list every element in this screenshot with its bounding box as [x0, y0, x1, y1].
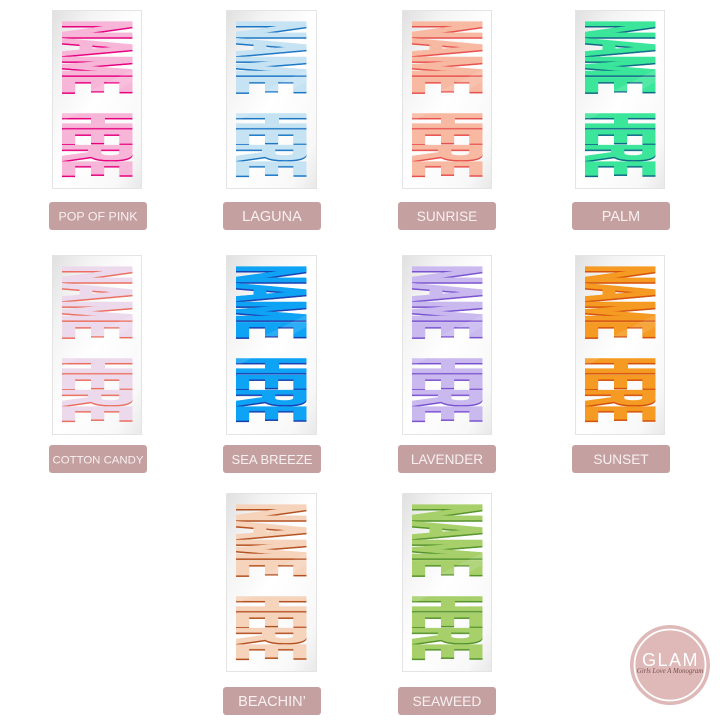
label: laguna — [223, 202, 321, 230]
label: seaweed: SEAWEED — [413, 693, 481, 709]
towel: cotton candy — [41, 256, 151, 434]
towel: laguna — [215, 10, 325, 188]
towel: seaweed: HERE — [391, 596, 501, 659]
towel: cotton candy: HERE — [41, 360, 151, 423]
towel: cotton candy: NAME — [41, 266, 151, 338]
towel: palm: HERE — [564, 113, 674, 176]
towel: seaweed: NAME — [391, 504, 501, 576]
towel: laguna: NAME — [215, 21, 325, 93]
label: cotton candy — [49, 445, 147, 473]
towel: sunrise: NAME — [391, 21, 501, 93]
towel: palm: NAME — [564, 22, 674, 95]
towel: beachin: NAME — [215, 503, 325, 575]
towel: pop of pink: NAME — [41, 22, 151, 95]
towel: sunset: HERE — [564, 360, 674, 423]
towel: beachin — [215, 494, 325, 672]
towel: palm: HERE — [564, 114, 674, 178]
towel: sunrise: HERE — [391, 113, 501, 176]
towel: sunrise — [391, 10, 501, 188]
towel: sea breeze — [215, 256, 325, 434]
towel: palm — [564, 10, 674, 188]
towel: seaweed — [391, 494, 501, 672]
towel: sea breeze: HERE — [215, 357, 325, 420]
towel: sea breeze: NAME — [215, 266, 325, 338]
logo: glam badge: GLAM — [642, 650, 699, 670]
towel: sunrise: NAME — [391, 20, 501, 92]
towel: lavender: HERE — [391, 360, 501, 423]
towel: pop of pink: NAME — [41, 21, 151, 93]
towel: lavender: NAME — [391, 266, 501, 338]
towel: lavender: NAME — [391, 265, 501, 337]
towel: sunset — [564, 256, 674, 434]
towel: lavender — [391, 256, 501, 434]
towel: beachin: HERE — [215, 598, 325, 661]
towel: beachin: NAME — [215, 506, 325, 578]
towel: sunrise: NAME — [391, 22, 501, 95]
towel: seaweed: NAME — [391, 506, 501, 578]
towel: beachin: HERE — [215, 596, 325, 659]
label: pop of pink: POP OF PINK — [59, 210, 138, 224]
towel: pop of pink: HERE — [41, 113, 151, 176]
towel: sunset: HERE — [564, 358, 674, 421]
towel: sunset: NAME — [564, 266, 674, 338]
label: sunset — [572, 445, 670, 473]
towel: lavender: HERE — [391, 358, 501, 421]
towel: beachin: HERE — [215, 595, 325, 658]
towel: laguna: HERE — [215, 114, 325, 178]
towel: palm: NAME — [564, 20, 674, 92]
label: sunrise — [398, 202, 496, 230]
label: lavender — [398, 445, 496, 473]
label: sea breeze: SEA BREEZE — [232, 452, 313, 467]
towel: sunset: NAME — [564, 265, 674, 337]
towel: sea breeze: NAME — [215, 265, 325, 337]
towel: seaweed: NAME — [391, 503, 501, 575]
label: cotton candy: COTTON CANDY — [53, 454, 144, 466]
towel: laguna: HERE — [215, 112, 325, 175]
towel: laguna: NAME — [215, 22, 325, 95]
logo: glam badge — [630, 625, 710, 705]
towel: sunset: NAME — [564, 268, 674, 340]
towel: seaweed: HERE — [391, 598, 501, 661]
logo: glam badge: Girls Love A Monogram — [637, 668, 703, 675]
towel: pop of pink — [41, 10, 151, 188]
towel: palm: NAME — [564, 21, 674, 93]
towel: cotton candy: HERE — [41, 357, 151, 420]
towel: sea breeze: HERE — [215, 360, 325, 423]
towel: cotton candy: HERE — [41, 358, 151, 421]
label: laguna: LAGUNA — [242, 209, 302, 225]
label: seaweed — [398, 687, 496, 715]
label: sea breeze — [223, 445, 321, 473]
towel: cotton candy: NAME — [41, 268, 151, 340]
towel: seaweed: HERE — [391, 595, 501, 658]
label: sunrise: SUNRISE — [417, 209, 477, 224]
towel: sea breeze: NAME — [215, 268, 325, 340]
towel: laguna: NAME — [215, 20, 325, 92]
towel: pop of pink: HERE — [41, 112, 151, 175]
label: lavender: LAVENDER — [411, 452, 483, 467]
towel: palm: HERE — [564, 112, 674, 175]
towel: sunset: HERE — [564, 357, 674, 420]
label: palm — [572, 202, 670, 230]
towel: pop of pink: HERE — [41, 114, 151, 178]
label: palm: PALM — [602, 209, 640, 225]
towel: sunrise: HERE — [391, 112, 501, 175]
label: beachin: BEACHIN’ — [238, 694, 306, 710]
label: pop of pink — [49, 202, 147, 230]
towel: sunrise: HERE — [391, 114, 501, 178]
towel: sea breeze: HERE — [215, 358, 325, 421]
towel: laguna: HERE — [215, 113, 325, 176]
towel: lavender: HERE — [391, 357, 501, 420]
label: sunset: SUNSET — [593, 452, 649, 467]
towel: beachin: NAME — [215, 504, 325, 576]
towel: lavender: NAME — [391, 268, 501, 340]
label: beachin — [223, 687, 321, 715]
towel: pop of pink: NAME — [41, 20, 151, 92]
towel: cotton candy: NAME — [41, 265, 151, 337]
